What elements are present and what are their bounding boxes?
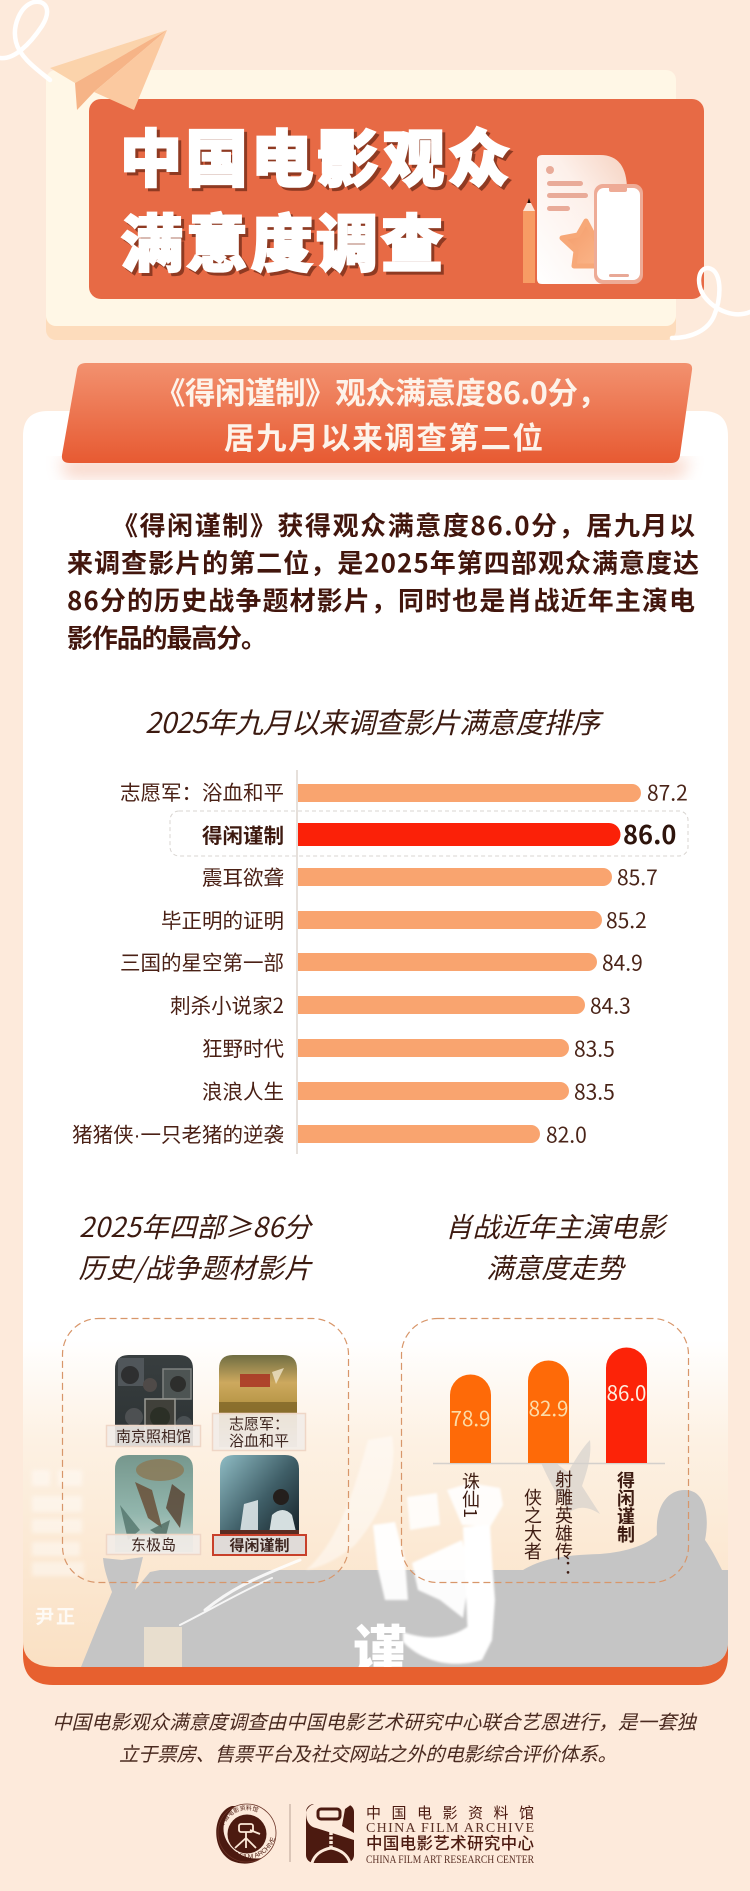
background artwork: film poster silhouette and calligraphy	[32, 1436, 728, 1686]
poster: 东极岛	[106, 1455, 200, 1555]
row: 得闲谨制: 得闲谨制	[202, 819, 284, 849]
baseline	[433, 1462, 665, 1464]
bar: 射雕英雄传：侠之大者: 侠之大者	[520, 1488, 546, 1560]
calligraphy brush strokes	[306, 1436, 503, 1664]
poster: 志愿军：浴血和平: 浴血和平	[229, 1430, 289, 1451]
intro paragraph: 来调查影片的第二位，是2025年第四部观众满意度达	[67, 544, 699, 580]
section heading: historical and war films: 历史/战争题材影片	[78, 1246, 313, 1286]
panel: poster grid	[62, 1318, 348, 1582]
row: 三国的星空第一部: 三国的星空第一部	[120, 946, 284, 976]
intro paragraph: 《得闲谨制》获得观众满意度86.0分，居九月以	[112, 506, 695, 543]
row: 浪浪人生: 浪浪人生	[202, 1075, 284, 1105]
logo text: 中国电影艺术研究中心	[366, 1830, 534, 1854]
row: 毕正明的证明: 毕正明的证明	[161, 904, 284, 934]
row: 三国的星空第一部: 84.9	[602, 948, 643, 978]
row: 狂野时代: 狂野时代	[202, 1032, 284, 1062]
row: 志愿军：浴血和平	[120, 776, 688, 808]
bar: 得闲谨制: 得闲谨制	[613, 1471, 639, 1543]
icon: paper plane	[50, 30, 167, 110]
star	[562, 221, 608, 266]
faint credits	[32, 1470, 84, 1629]
subtitle line 1: 《得闲谨制》观众满意度86.0分，	[155, 369, 608, 413]
row: 浪浪人生	[202, 1075, 615, 1106]
row: 震耳欲聋: 震耳欲聋	[202, 861, 284, 891]
axis line	[296, 770, 298, 1154]
logo: China Film Archive seal	[216, 1804, 276, 1864]
poster: 志愿军：浴血和平: 志愿军：	[229, 1413, 289, 1434]
row: 猪猪侠·一只老猪的逆袭	[72, 1118, 587, 1150]
row: 狂野时代	[202, 1032, 615, 1064]
row: 猪猪侠·一只老猪的逆袭: 猪猪侠·一只老猪的逆袭	[72, 1118, 284, 1148]
logo text	[366, 1802, 534, 1866]
splatter strokes	[180, 1560, 300, 1625]
header card	[46, 70, 676, 340]
bar: 射雕英雄传：侠之大者: 射雕英雄传：	[551, 1470, 577, 1578]
logo: China Film Archive seal: 中国电影资料馆	[220, 1805, 258, 1825]
row: 浪浪人生: 83.5	[574, 1076, 615, 1106]
bar: 射雕英雄传：侠之大者: 82.9	[529, 1392, 568, 1422]
intro paragraph: 影作品的最高分。	[67, 618, 267, 656]
section heading: Xiao Zhan trend	[445, 1205, 668, 1286]
bar: 诛仙1: 诛仙1	[458, 1472, 484, 1518]
section heading: Xiao Zhan trend: 满意度走势	[486, 1246, 626, 1286]
logo: China Film Archive seal: CHINA FILM ARCHIVE	[235, 1837, 275, 1858]
row: 刺杀小说家2	[170, 989, 631, 1020]
section heading: historical and war films: 2025年四部≥86分	[79, 1205, 314, 1245]
row: 志愿军：浴血和平: 志愿军：浴血和平	[120, 776, 284, 806]
bar: 诛仙1	[450, 1374, 491, 1518]
bar: 得闲谨制	[606, 1348, 647, 1543]
bar: 射雕英雄传：侠之大者	[520, 1360, 577, 1578]
row: 三国的星空第一部	[120, 946, 643, 978]
subtitle banner	[60, 363, 692, 478]
poster: 南京照相馆	[106, 1355, 200, 1447]
row: 震耳欲聋: 85.7	[617, 862, 658, 892]
pencil	[523, 198, 535, 283]
row: 得闲谨制: 86.0	[623, 815, 676, 852]
white content panel	[23, 411, 728, 1685]
title line 2: 满意度调查	[121, 194, 443, 284]
intro paragraph	[67, 506, 699, 656]
icon: survey paper, phone and pencil	[523, 155, 643, 284]
row: 震耳欲聋	[202, 861, 658, 892]
poster: 得闲谨制: 得闲谨制	[229, 1534, 290, 1556]
section heading: historical and war films	[78, 1205, 314, 1286]
title panel	[89, 99, 704, 299]
poster: 东极岛: 东极岛	[131, 1534, 176, 1555]
subtitle line 2: 居九月以来调查第二位	[224, 414, 543, 458]
paper	[537, 155, 627, 284]
section heading: Xiao Zhan trend: 肖战近年主演电影	[445, 1205, 668, 1245]
panel: trend bar chart	[402, 1318, 688, 1582]
decorative curl top-left	[0, 2, 50, 80]
bar: 得闲谨制: 86.0	[607, 1376, 646, 1406]
poster: 南京照相馆: 南京照相馆	[116, 1426, 191, 1446]
chart title: 2025年九月以来调查影片满意度排序	[145, 701, 604, 742]
silhouette figures	[81, 1440, 728, 1667]
phone	[594, 184, 643, 284]
highlight dashed frame	[170, 811, 688, 856]
footnote: 中国电影观众满意度调查由中国电影艺术研究中心联合艺恩进行，是一套独	[52, 1706, 697, 1735]
row: 毕正明的证明: 85.2	[606, 905, 647, 935]
bar chart: satisfaction ranking	[72, 770, 688, 1154]
row: 猪猪侠·一只老猪的逆袭: 82.0	[546, 1120, 587, 1150]
row: 得闲谨制	[202, 815, 676, 852]
row: 狂野时代: 83.5	[574, 1034, 615, 1064]
logo text: CHINA FILM ART RESEARCH CENTER	[366, 1854, 534, 1866]
row: 刺杀小说家2: 84.3	[590, 990, 631, 1020]
logo text: 中国电影资料馆	[366, 1802, 534, 1823]
row: 刺杀小说家2: 刺杀小说家2	[170, 989, 284, 1019]
bar: 诛仙1: 78.9	[451, 1402, 490, 1432]
divider	[289, 1804, 291, 1862]
poster: 志愿军：浴血和平	[212, 1355, 306, 1451]
title line 1: 中国电影观众	[120, 109, 510, 199]
decorative curl right	[672, 268, 750, 338]
intro paragraph: 86分的历史战争题材影片，同时也是肖战近年主演电	[67, 581, 695, 618]
footnote	[52, 1706, 697, 1767]
row: 毕正明的证明	[161, 904, 647, 935]
faint credits: 尹正	[35, 1602, 75, 1629]
logo text: CHINA FILM ARCHIVE	[366, 1821, 534, 1836]
footnote: 立于票房、售票平台及社交网站之外的电影综合评价体系。	[119, 1738, 617, 1767]
calligraphy character: 谨	[353, 1607, 407, 1686]
logo: China Film Art Research Center mark	[306, 1804, 354, 1863]
poster: 得闲谨制	[213, 1455, 306, 1556]
row: 志愿军：浴血和平: 87.2	[647, 778, 688, 808]
